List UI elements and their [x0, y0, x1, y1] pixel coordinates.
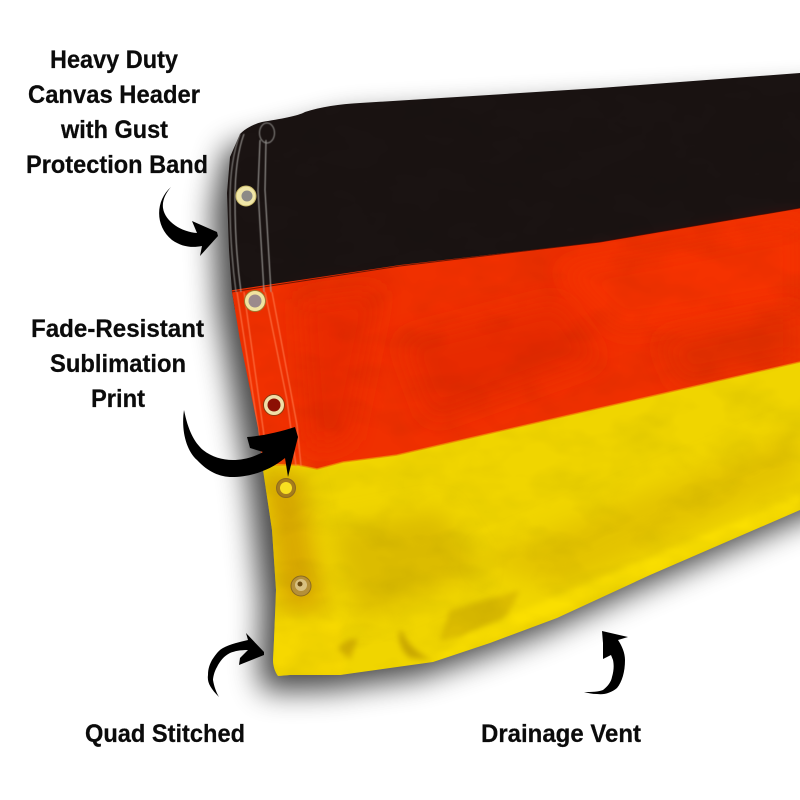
- text: fade-resistant sublimation print: Sublimation: [50, 350, 186, 378]
- text: heavy duty canvas header: Heavy Duty: [50, 46, 178, 74]
- stripe seams: [225, 208, 800, 293]
- grommet 4: [276, 478, 296, 498]
- grommet 2: [244, 290, 266, 312]
- arrow: print callout: [183, 410, 298, 477]
- grommet 5: [291, 576, 311, 596]
- text: drainage vent: Drainage Vent: [481, 720, 642, 748]
- grommet 3: [264, 394, 284, 416]
- flag drop shadow: [213, 88, 800, 691]
- text: heavy duty canvas header: Protection Band: [26, 151, 208, 179]
- text: heavy duty canvas header: with Gust: [60, 116, 169, 144]
- arrow: quad stitched callout: [208, 633, 264, 697]
- text: quad stitched: Quad Stitched: [85, 720, 245, 748]
- yellow stripe: [255, 362, 800, 690]
- black stripe: [200, 60, 800, 310]
- red stripe: [220, 208, 800, 469]
- text: fade-resistant sublimation print: Fade-Resistant: [31, 315, 205, 343]
- text: fade-resistant sublimation print: [31, 315, 205, 413]
- text: heavy duty canvas header: [26, 46, 208, 179]
- text: fade-resistant sublimation print: Print: [91, 385, 146, 413]
- canvas header stitching: [230, 123, 301, 466]
- arrow: drainage vent callout: [584, 631, 628, 694]
- grommet 1: [236, 186, 256, 206]
- fabric creases: [238, 226, 800, 676]
- German flag: [200, 60, 800, 690]
- text: heavy duty canvas header: Canvas Header: [28, 81, 200, 109]
- arrow: header callout: [159, 187, 218, 256]
